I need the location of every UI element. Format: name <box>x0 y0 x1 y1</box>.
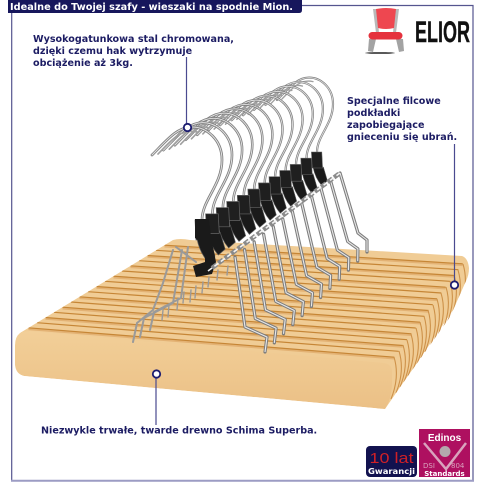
title band: Idealne do Twojej szafy - wieszaki na spodnie Mion. <box>10 2 293 13</box>
wood front face <box>15 331 392 409</box>
badge: 10 years warranty: Gwarancji <box>368 467 415 476</box>
badge: Edinos standards: 804 <box>451 462 465 470</box>
badge: 10 years warranty <box>366 446 417 477</box>
wood end grain <box>391 264 465 399</box>
wood slat shadows <box>28 246 463 358</box>
wood top surface <box>10 235 470 410</box>
badge: Edinos standards: Edinos <box>428 433 462 444</box>
icon: red chair <box>365 8 404 54</box>
metal hooks <box>152 78 333 262</box>
metal wire legs, right side <box>235 173 367 352</box>
callout line and marker <box>184 57 191 131</box>
callout text: gnieceniu się ubrań. <box>347 131 457 143</box>
badge: Edinos standards: DSI <box>423 462 435 470</box>
wood slat lines <box>28 245 463 357</box>
callout line and marker <box>153 370 160 425</box>
badge: Edinos standards: Standards <box>424 470 465 478</box>
metal wire legs, left side <box>133 247 228 342</box>
callout: felt pads <box>347 96 458 289</box>
badge: Edinos standards <box>419 429 470 478</box>
callout text: Wysokogatunkowa stal chromowana, <box>33 34 234 45</box>
logo: Elior <box>365 8 470 54</box>
metal wire highlights <box>235 173 367 352</box>
callout text: obciążenie aż 3kg. <box>33 58 133 69</box>
callout line and marker <box>451 144 458 289</box>
callout: wood <box>41 370 317 436</box>
callout text: zapobiegające <box>347 120 425 131</box>
clip bar <box>208 173 340 271</box>
wooden hanger stack <box>10 235 470 410</box>
badge: 10 years warranty: 10 lat <box>370 450 414 467</box>
callout text: dzięki czemu hak wytrzymuje <box>33 46 193 57</box>
callout text: podkładki <box>347 108 400 119</box>
callout text: Niezwykle trwałe, twarde drewno Schima Superba. <box>41 426 317 436</box>
callout: chrome steel <box>33 34 234 131</box>
callout text: Specjalne filcowe <box>347 96 441 107</box>
front clip <box>193 219 216 277</box>
